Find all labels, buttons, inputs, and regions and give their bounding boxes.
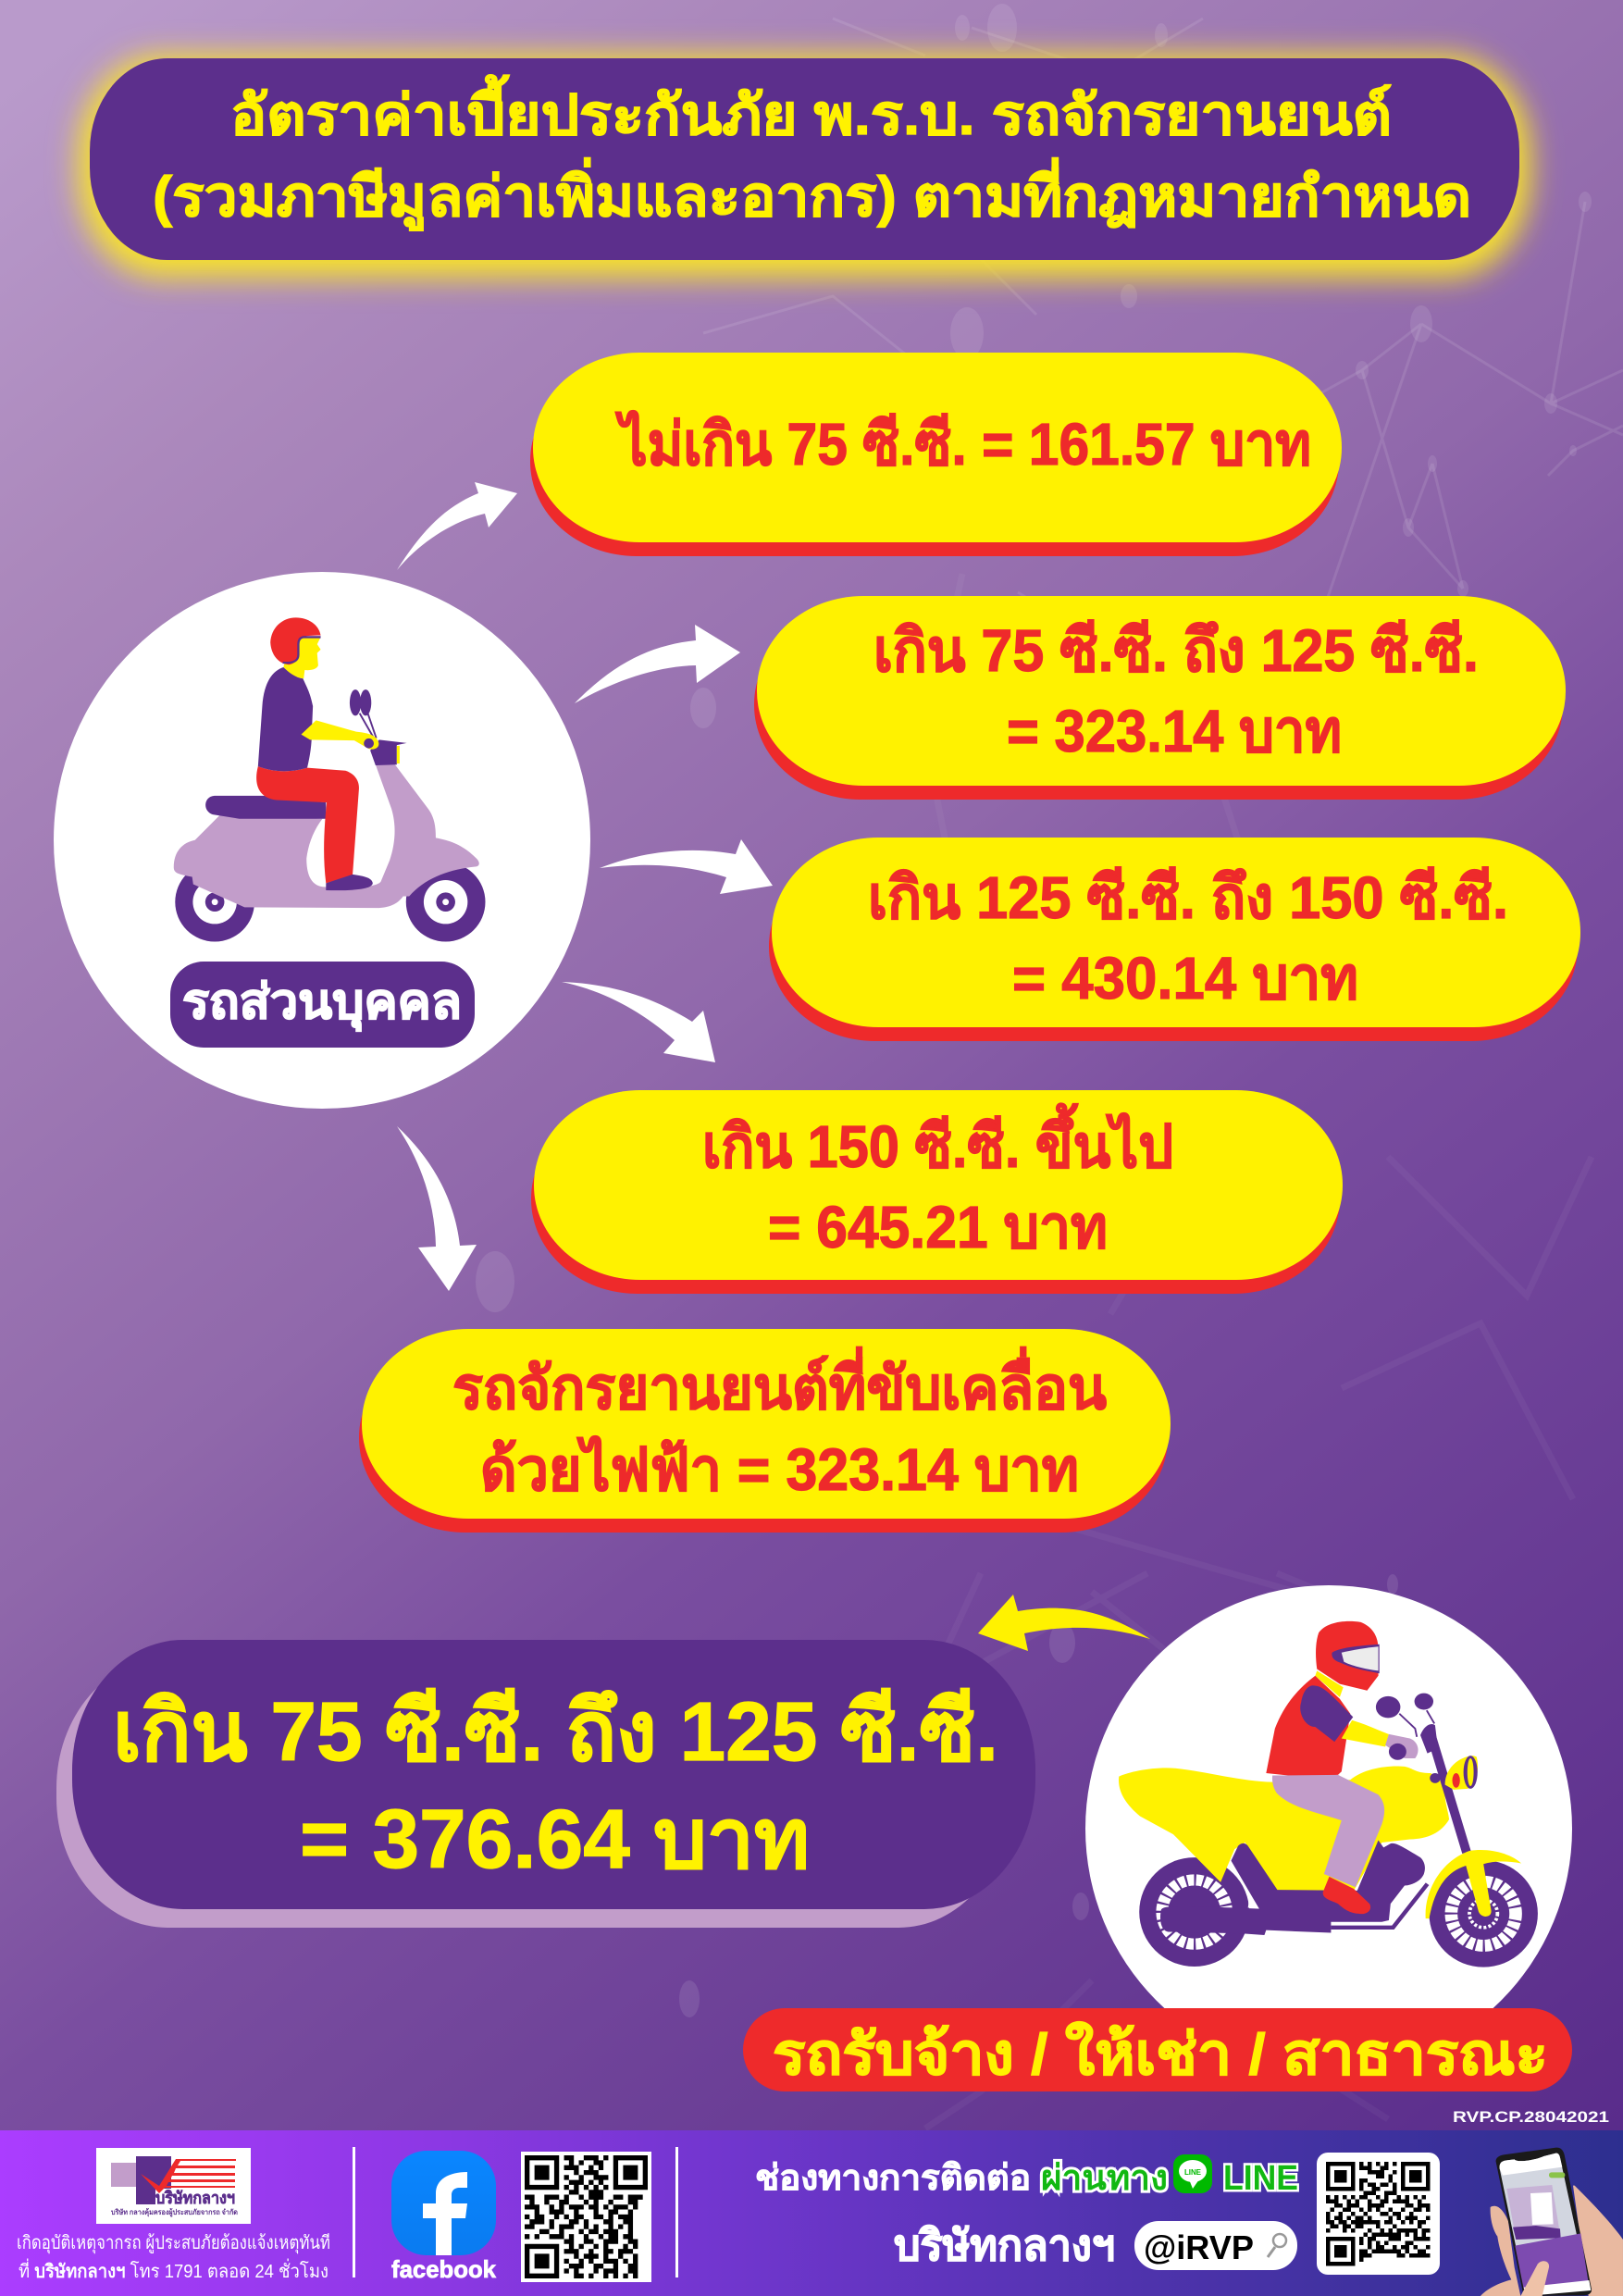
company name and LINE id [894, 2221, 1297, 2270]
title banner [79, 56, 1530, 278]
yellow arrow [978, 1595, 1150, 1651]
panel: commercial rate [56, 1640, 1035, 1928]
banner: commercial vehicle label: รถรับจ้าง / ให้เช่า / สาธารณะ [773, 2021, 1548, 2087]
title banner: อัตราค่าเบี้ยประกันภัย พ.ร.บ. รถจักรยานยนต์ [230, 74, 1392, 146]
rate pill: 75 to 125cc: เกิน 75 ซี.ซี. ถึง 125 ซี.ซี. [873, 617, 1479, 684]
logo: RVP [96, 2148, 251, 2224]
rate pill: over 150cc: เกิน 150 ซี.ซี. ขึ้นไป [702, 1103, 1173, 1180]
icon: scooter rider [174, 617, 485, 942]
arrow to pill 1 [397, 482, 517, 570]
phone in hand [1481, 2148, 1623, 2296]
icon: LINE: LINE [1184, 2168, 1202, 2177]
rate pill: 125 to 150cc: = 430.14 บาท [1012, 945, 1358, 1011]
rate pill: not over 75cc [530, 353, 1342, 556]
accident notice text: เกิดอุบัติเหตุจากรถ ผู้ประสบภัยต้องแจ้งเหตุทันที [17, 2233, 330, 2254]
reference code: RVP.CP.28042021 [1453, 2108, 1609, 2126]
accident notice text: ที่ บริษัทกลางฯ โทร 1791 ตลอด 24 ชั่วโมง [19, 2258, 328, 2282]
rate pill: 125 to 150cc: เกิน 125 ซี.ซี. ถึง 150 ซี.ซี. [868, 864, 1508, 931]
arrow to pill 5 [397, 1126, 477, 1291]
circle: commercial motorcycle [1085, 1585, 1572, 2072]
banner: commercial vehicle label [743, 2008, 1572, 2091]
icon: LINE [1173, 2154, 1212, 2193]
contact via LINE: LINE [1223, 2159, 1298, 2198]
arrow to pill 2 [575, 625, 740, 703]
arrow to pill 4 [562, 982, 715, 1062]
label: private vehicle [170, 962, 475, 1048]
rate pill: over 150cc: = 645.21 บาท [768, 1194, 1108, 1260]
contact via LINE [755, 2154, 1298, 2198]
rate pill: over 150cc [531, 1090, 1343, 1294]
rate pill: electric: รถจักรยานยนต์ที่ขับเคลื่อน [452, 1347, 1107, 1421]
company name and LINE id: @iRVP [1144, 2228, 1254, 2266]
panel: commercial rate: เกิน 75 ซี.ซี. ถึง 125 ซี.ซี. [113, 1686, 998, 1779]
logo: RVP: บริษัทกลางฯ [155, 2189, 235, 2207]
title banner: (รวมภาษีมูลค่าเพิ่มและอากร) ตามที่กฎหมายกำหนด [153, 157, 1471, 231]
rate pill: 125 to 150cc [769, 838, 1580, 1041]
footer [0, 2130, 1623, 2296]
panel: commercial rate: = 376.64 บาท [300, 1793, 810, 1886]
rate pill: electric [359, 1329, 1171, 1533]
QR code: LINE [1317, 2153, 1440, 2275]
contact via LINE: ช่องทางการติดต่อ [755, 2159, 1031, 2198]
QR code: facebook [521, 2152, 651, 2282]
logo: RVP: บริษัท กลางคุ้มครองผู้ประสบภัยจากรถ จำกัด [111, 2207, 238, 2217]
rate pill: 75 to 125cc: = 323.14 บาท [1007, 698, 1342, 764]
rate pill: not over 75cc: ไม่เกิน 75 ซี.ซี. = 161.57 บาท [614, 410, 1311, 478]
circle: private scooter [54, 572, 590, 1109]
contact via LINE: ผ่านทาง [1041, 2159, 1168, 2198]
accident notice text [17, 2233, 330, 2282]
icon: motorcycle rider [1119, 1621, 1538, 1967]
icon: facebook: facebook [391, 2255, 497, 2283]
icon: facebook [391, 2151, 497, 2283]
rate pill: 75 to 125cc [754, 596, 1566, 800]
label: private vehicle: รถส่วนบุคคล [182, 975, 462, 1032]
arrow to pill 3 [600, 839, 773, 894]
company name and LINE id: บริษัทกลางฯ [894, 2221, 1115, 2269]
rate pill: electric: ด้วยไฟฟ้า = 323.14 บาท [480, 1435, 1079, 1503]
